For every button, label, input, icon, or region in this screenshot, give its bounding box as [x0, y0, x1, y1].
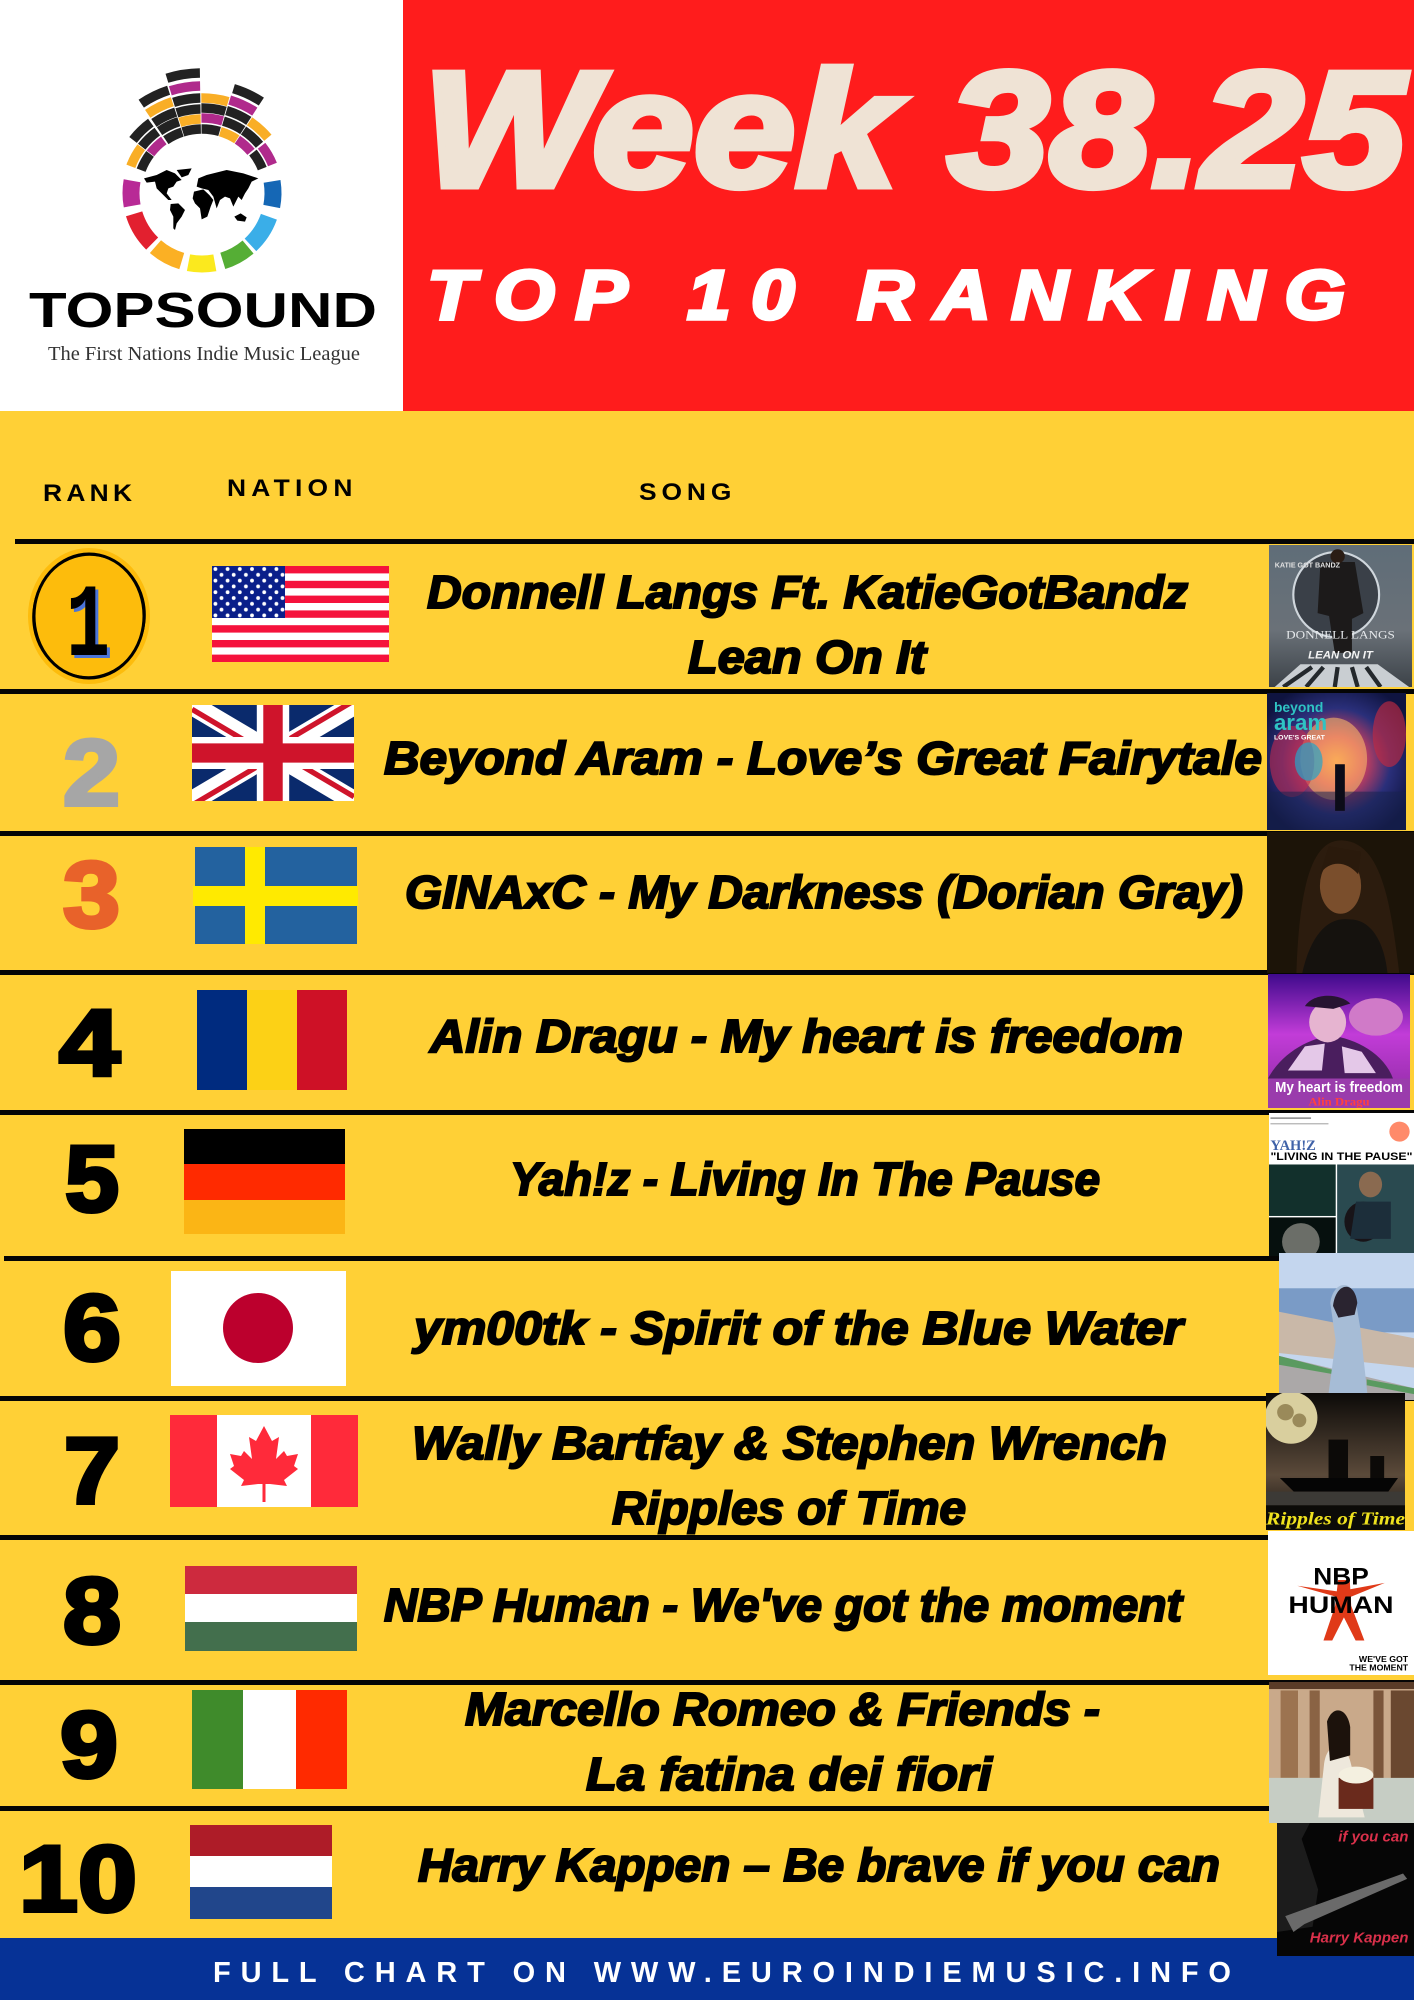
- logo wordmark: TOPSOUND: [29, 284, 377, 338]
- album cover 2: aram: [1274, 710, 1327, 735]
- background panel: [0, 411, 1414, 1939]
- song 3: GINAxC - My Darkness (Dorian Gray): [405, 866, 1243, 918]
- album cover 8: THE MOMENT: [1349, 1663, 1409, 1673]
- album cover 8: [1268, 1531, 1414, 1675]
- rank 8: 8: [63, 1558, 121, 1663]
- album cover 8: WE'VE GOT: [1359, 1654, 1409, 1664]
- album cover 5: [1269, 1113, 1414, 1256]
- album cover 10: Harry Kappen: [1310, 1931, 1409, 1947]
- flag: Netherlands: [190, 1825, 332, 1919]
- flag: Hungary: [185, 1566, 357, 1651]
- flag: Sweden: [193, 847, 358, 944]
- album cover 6: [1279, 1253, 1414, 1400]
- album cover 7: [1265, 1393, 1405, 1530]
- song 2: Beyond Aram - Love’s Great Fairytale: [384, 732, 1262, 784]
- song 5: Yah!z - Living In The Pause: [510, 1153, 1100, 1205]
- flag: Japan: [171, 1271, 346, 1386]
- song 1: Donnell Langs Ft. KatieGotBandz: [427, 566, 1188, 618]
- album cover 8: HUMAN: [1288, 1592, 1394, 1619]
- rank 2: 2: [63, 720, 120, 825]
- header: nation: NATION: [227, 475, 352, 502]
- album cover 4: Alin Dragu: [1308, 1095, 1370, 1108]
- album cover 2: [1267, 693, 1406, 830]
- song 8: NBP Human - We've got the moment: [384, 1579, 1184, 1631]
- panel: title banner: [403, 0, 1414, 411]
- song 9: Marcello Romeo & Friends -: [465, 1683, 1100, 1735]
- album cover 5: "LIVING IN THE PAUSE": [1270, 1151, 1413, 1163]
- album cover 10: [1277, 1823, 1414, 1956]
- album cover 1: LEAN ON IT: [1308, 650, 1374, 662]
- subtitle: TOP 10 RANKING: [427, 256, 1345, 334]
- icon: equalizer arcs: [52, 43, 352, 343]
- column headers: [43, 475, 731, 507]
- row dividers: [0, 539, 1414, 1811]
- song 7: Ripples of Time: [612, 1482, 966, 1534]
- flag: Italy: [192, 1690, 347, 1789]
- rank 5: 5: [65, 1126, 119, 1231]
- rank 1 badge: 1: [66, 569, 110, 687]
- song 1: [427, 566, 1188, 683]
- album cover 1: DONNELL LANGS: [1286, 630, 1395, 642]
- rank 1 badge: [27, 548, 151, 690]
- panel: logo: [0, 0, 403, 411]
- flag: UK: [192, 705, 354, 801]
- rank 6: 6: [63, 1275, 121, 1380]
- flag: Canada: [170, 1415, 358, 1507]
- album cover 3: [1267, 832, 1414, 973]
- icon: globe ring: [102, 93, 302, 293]
- song 6: ym00tk - Spirit of the Blue Water: [412, 1302, 1185, 1354]
- album cover 2: LOVE'S GREAT: [1274, 735, 1326, 742]
- rank 7: 7: [64, 1418, 120, 1523]
- song 9: La fatina dei fiori: [586, 1748, 993, 1800]
- flag: Germany: [184, 1129, 345, 1234]
- album cover 5: YAH!Z: [1270, 1138, 1316, 1154]
- flag: USA: [212, 566, 389, 662]
- rank 9: 9: [60, 1692, 118, 1797]
- album cover 1: [1269, 545, 1412, 687]
- footer text: FULL CHART ON WWW.EUROINDIEMUSIC.INFO: [213, 1957, 1231, 1989]
- song 7: Wally Bartfay & Stephen Wrench: [412, 1417, 1167, 1469]
- footer bar: [0, 1938, 1414, 2000]
- rank 4: 4: [59, 990, 120, 1095]
- rank 3: 3: [63, 842, 120, 947]
- song 1: Lean On It: [688, 631, 928, 683]
- logo tagline: The First Nations Indie Music League: [48, 343, 360, 365]
- title: Week 38.25: [423, 38, 1408, 221]
- song 7: [412, 1417, 1167, 1534]
- header: rank: RANK: [43, 480, 132, 507]
- album cover 7: Ripples of Time: [1265, 1509, 1405, 1528]
- song 10: Harry Kappen – Be brave if you can: [418, 1839, 1220, 1891]
- album cover 2: beyond: [1274, 700, 1323, 715]
- album cover 10: if you can: [1338, 1830, 1409, 1846]
- album cover 1: KATIE GOT BANDZ: [1275, 562, 1341, 570]
- album cover 8: NBP: [1313, 1563, 1369, 1590]
- song 4: Alin Dragu - My heart is freedom: [429, 1010, 1183, 1062]
- rank 10: 10: [19, 1826, 137, 1931]
- header: song: SONG: [639, 479, 731, 506]
- flag: Romania: [197, 990, 347, 1090]
- icon: world map: [144, 168, 258, 230]
- song 9: [465, 1683, 1100, 1800]
- rank 1 badge: 1: [69, 572, 113, 690]
- album cover 4: [1268, 974, 1410, 1108]
- album cover 9: [1269, 1682, 1414, 1823]
